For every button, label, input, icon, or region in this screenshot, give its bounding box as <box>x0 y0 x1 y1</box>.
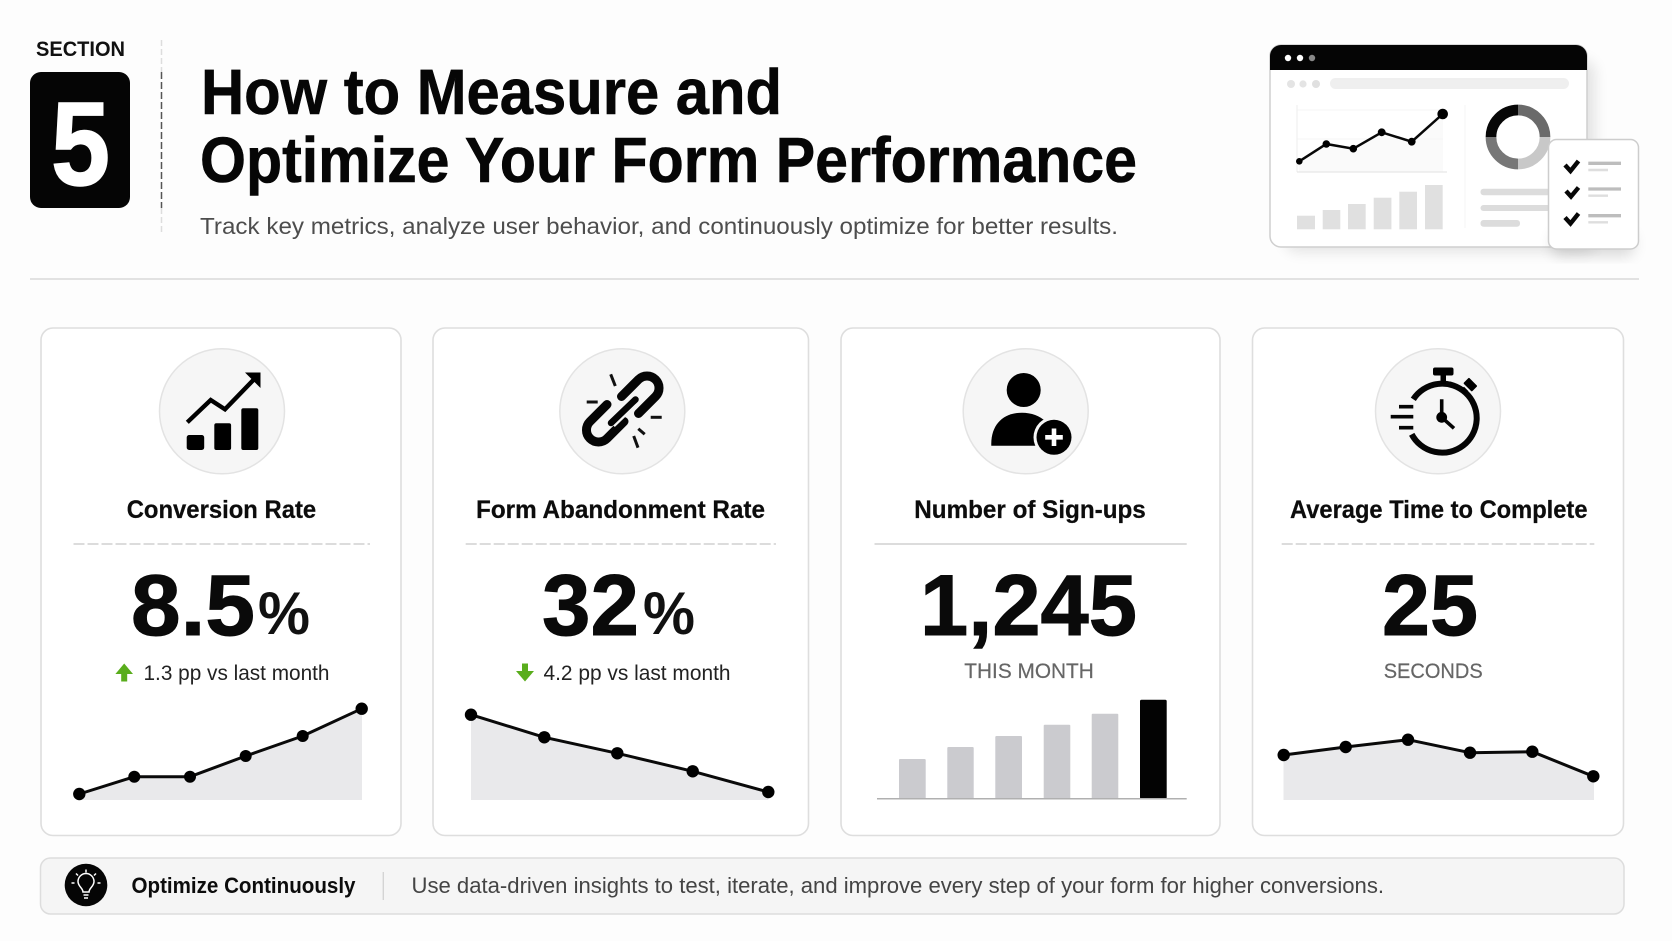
callout: optimize continuously <box>40 858 1624 914</box>
sparkline <box>465 708 774 800</box>
panel: form abandonment rate <box>433 328 808 836</box>
sparkline <box>1278 734 1600 800</box>
icon: add user <box>963 349 1088 474</box>
trend up arrow <box>115 664 133 682</box>
dashboard illustration <box>1270 45 1638 256</box>
metric name: Average Time to Complete <box>1290 496 1588 524</box>
section number badge <box>30 72 130 211</box>
metric name: Number of Sign-ups <box>914 496 1146 524</box>
trend text: 4.2 pp vs last month <box>544 662 730 685</box>
metric value: 1,245 <box>920 558 1137 654</box>
section number badge: 5 <box>51 78 110 211</box>
callout text: Use data-driven insights to test, iterate, and improve every step of your form for higher conversions. <box>412 873 1384 898</box>
icon: growth chart <box>160 349 284 474</box>
mini line chart <box>1296 105 1448 172</box>
icon: light bulb <box>65 864 107 906</box>
metric name: Form Abandonment Rate <box>476 496 765 524</box>
metric value <box>131 558 310 654</box>
section label: SECTION <box>36 38 125 61</box>
unit label: SECONDS <box>1384 660 1483 683</box>
callout heading: Optimize Continuously <box>132 873 356 898</box>
icon: broken link <box>560 349 685 474</box>
panel: conversion rate <box>41 328 401 836</box>
title: How to Measure and <box>201 56 782 128</box>
panel: average time to complete <box>1252 328 1624 836</box>
check marks <box>1565 161 1578 224</box>
unit label: THIS MONTH <box>964 660 1094 683</box>
checklist card <box>1548 140 1638 249</box>
metric value: 32 <box>542 558 639 654</box>
metric value: 8.5 <box>131 558 255 654</box>
mini text lines <box>1480 189 1552 227</box>
bar chart <box>877 700 1187 799</box>
mini donut chart <box>1491 110 1545 164</box>
metric value: % <box>258 580 310 647</box>
subtitle: Track key metrics, analyze user behavior, and continuously optimize for better results. <box>200 213 1118 239</box>
mini bar chart <box>1297 185 1443 229</box>
title <box>200 56 1137 196</box>
title: Optimize Your Form Performance <box>200 124 1137 196</box>
icon: stopwatch <box>1376 349 1500 474</box>
metric value: 25 <box>1382 558 1478 654</box>
trend text: 1.3 pp vs last month <box>144 662 330 685</box>
metric value: % <box>643 580 695 647</box>
panel: number of sign-ups <box>841 328 1220 836</box>
trend down arrow <box>516 664 534 682</box>
sparkline <box>73 702 368 800</box>
metric value <box>542 558 695 654</box>
browser window <box>1270 45 1587 247</box>
header <box>30 38 1137 239</box>
metric name: Conversion Rate <box>127 496 316 524</box>
